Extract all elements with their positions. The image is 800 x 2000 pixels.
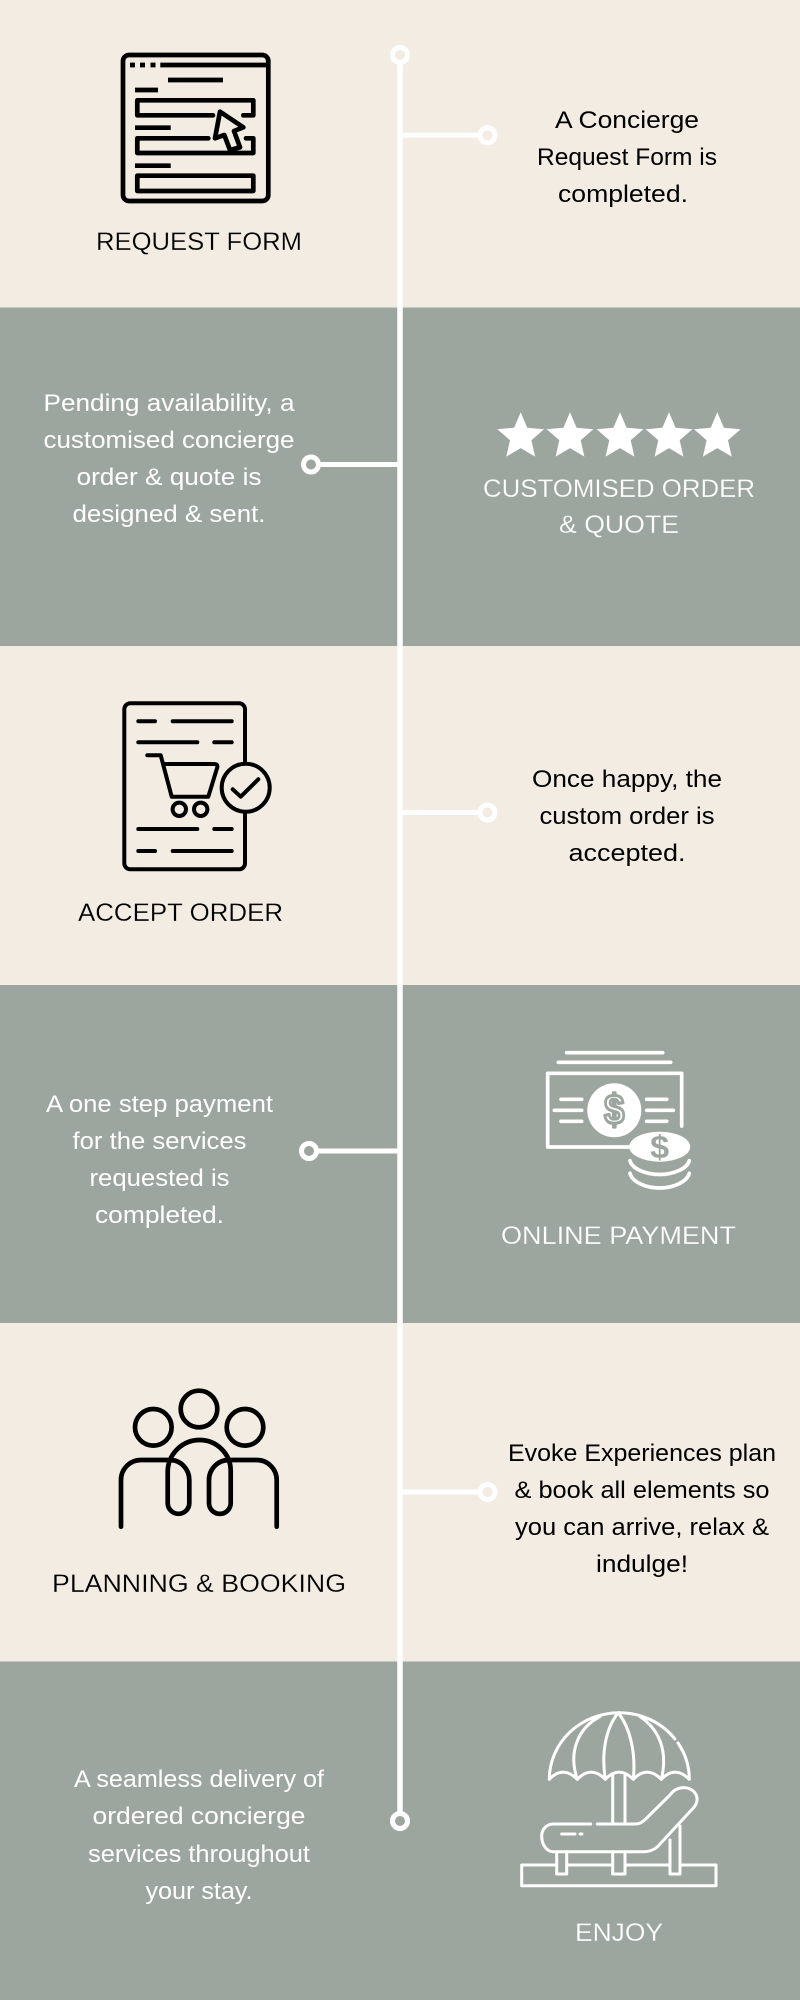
text: step 6 description: services throughout [88,1841,310,1868]
panel: online payment band [0,985,800,1323]
text: step 1 description [537,107,717,208]
text: step 3 description [532,766,722,867]
text: step 4 description: requested is [90,1165,230,1192]
icon: banknote and coins: $ [604,1086,624,1133]
panel: customised order band [0,308,800,646]
text: step 5 description: & book all elements so [514,1477,770,1504]
text: step 6 description: ordered concierge [92,1803,306,1830]
icon: beach umbrella and lounger [522,1713,716,1886]
icon: banknote and coins: $ [650,1129,669,1165]
text: step 6 description: A seamless delivery of [74,1766,324,1793]
text: step 2 description: designed & sent. [72,501,266,528]
heading: customised order and quote [483,475,755,539]
text: step 3 description: accepted. [568,840,686,867]
panel: planning and booking band [0,1323,800,1662]
text: step 2 description: order & quote is [76,464,262,491]
panel: enjoy band [0,1662,800,2000]
text: step 1 description: completed. [558,181,688,208]
text: step 1 description: Request Form is [537,144,717,171]
text: step 5 description: indulge! [596,1551,688,1578]
heading: planning and booking: PLANNING & BOOKING [52,1570,346,1598]
icon: banknote and coins [548,1053,690,1188]
icon: five stars [497,412,741,457]
timeline spine with nodes and branches [302,48,495,1828]
text: step 5 description [508,1440,776,1578]
icon: order document with cart and check [124,703,270,869]
text: step 4 description: completed. [95,1202,224,1229]
text: step 4 description: A one step payment [46,1091,273,1118]
icon: three people [121,1391,277,1527]
text: step 4 description [46,1091,273,1229]
text: step 5 description: Evoke Experiences plan [508,1440,776,1467]
panel: request form band [0,0,800,308]
text: step 2 description: customised concierge [44,427,294,454]
heading: customised order and quote: & QUOTE [559,511,679,539]
text: step 3 description: custom order is [540,803,714,830]
text: step 6 description [74,1766,324,1905]
text: step 1 description: A Concierge [555,107,699,134]
text: step 2 description: Pending availability, a [44,390,295,417]
text: step 6 description: your stay. [146,1878,252,1905]
heading: customised order and quote: CUSTOMISED ORDER [483,475,755,503]
heading: accept order: ACCEPT ORDER [78,899,283,927]
panel: accept order band [0,646,800,985]
text: step 5 description: you can arrive, relax & [515,1514,769,1541]
heading: request form: REQUEST FORM [96,228,302,256]
text: step 3 description: Once happy, the [532,766,722,793]
heading: online payment: ONLINE PAYMENT [501,1222,736,1250]
text: step 2 description [44,390,295,528]
icon: request form with cursor [123,55,268,201]
heading: enjoy: ENJOY [575,1919,663,1947]
text: step 4 description: for the services [72,1128,246,1155]
